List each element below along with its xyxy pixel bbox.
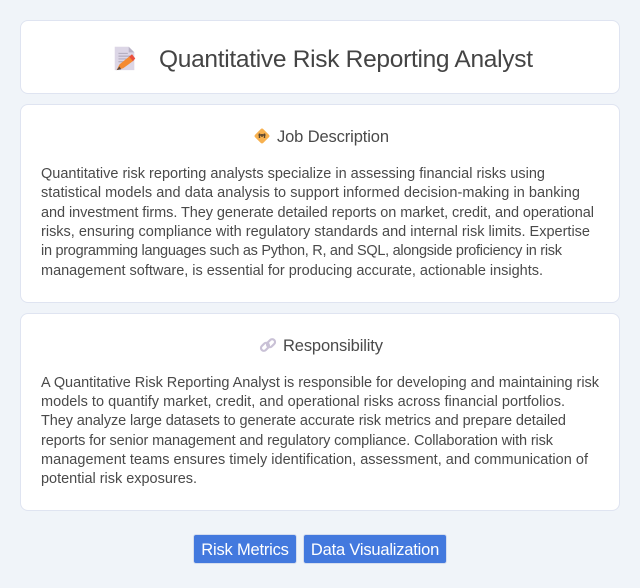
text block: job description: and investment firms. They generate detailed reports on market, credit, and operational: [41, 205, 594, 221]
text block: job description: statistical models and data analysis to support informed decision-making in banking: [41, 185, 580, 201]
panel: job description: [20, 104, 620, 303]
heading: job description: Job Description: [277, 128, 389, 146]
text block: job description: in programming languages such as Python, R, and SQL, alongside proficiency in risk: [41, 243, 563, 259]
text block: job description: [41, 166, 594, 279]
text block: responsibility: reports for senior management and regulatory compliance. Collaboration with risk: [41, 433, 554, 449]
text block: responsibility: A Quantitative Risk Reporting Analyst is responsible for developing and maintaining risk: [41, 375, 600, 391]
text block: responsibility: [41, 375, 600, 487]
text block: job description: risks, ensuring compliance with regulatory standards and internal risk limits. Expertise: [41, 224, 590, 240]
panel: title: [20, 20, 620, 94]
tag: data visualization: Data Visualization: [311, 541, 439, 559]
icon: document with pencil: [114, 46, 136, 70]
heading: title text: Quantitative Risk Reporting Analyst: [159, 46, 533, 73]
icon: diamond sign: [254, 128, 270, 144]
text block: job description: Quantitative risk reporting analysts specialize in assessing financial risks using: [41, 166, 545, 182]
icon: chain link: [260, 338, 276, 352]
tag: risk metrics: [193, 534, 297, 564]
text block: job description: management software, is essential for producing accurate, actionable insights.: [41, 263, 543, 279]
text block: responsibility: They analyze large datasets to generate accurate risk metrics and prepare detailed: [41, 413, 566, 429]
text block: responsibility: potential risk exposures.: [41, 471, 197, 487]
tag: risk metrics: Risk Metrics: [201, 541, 289, 559]
text block: responsibility: management teams ensures timely identification, assessment, and communication of: [41, 452, 589, 468]
tag: data visualization: [303, 534, 447, 564]
text block: responsibility: models to quantify market, credit, and operational risks across financial portfolios.: [41, 394, 565, 410]
heading: responsibility: Responsibility: [283, 337, 384, 355]
panel: responsibility: [20, 313, 620, 511]
